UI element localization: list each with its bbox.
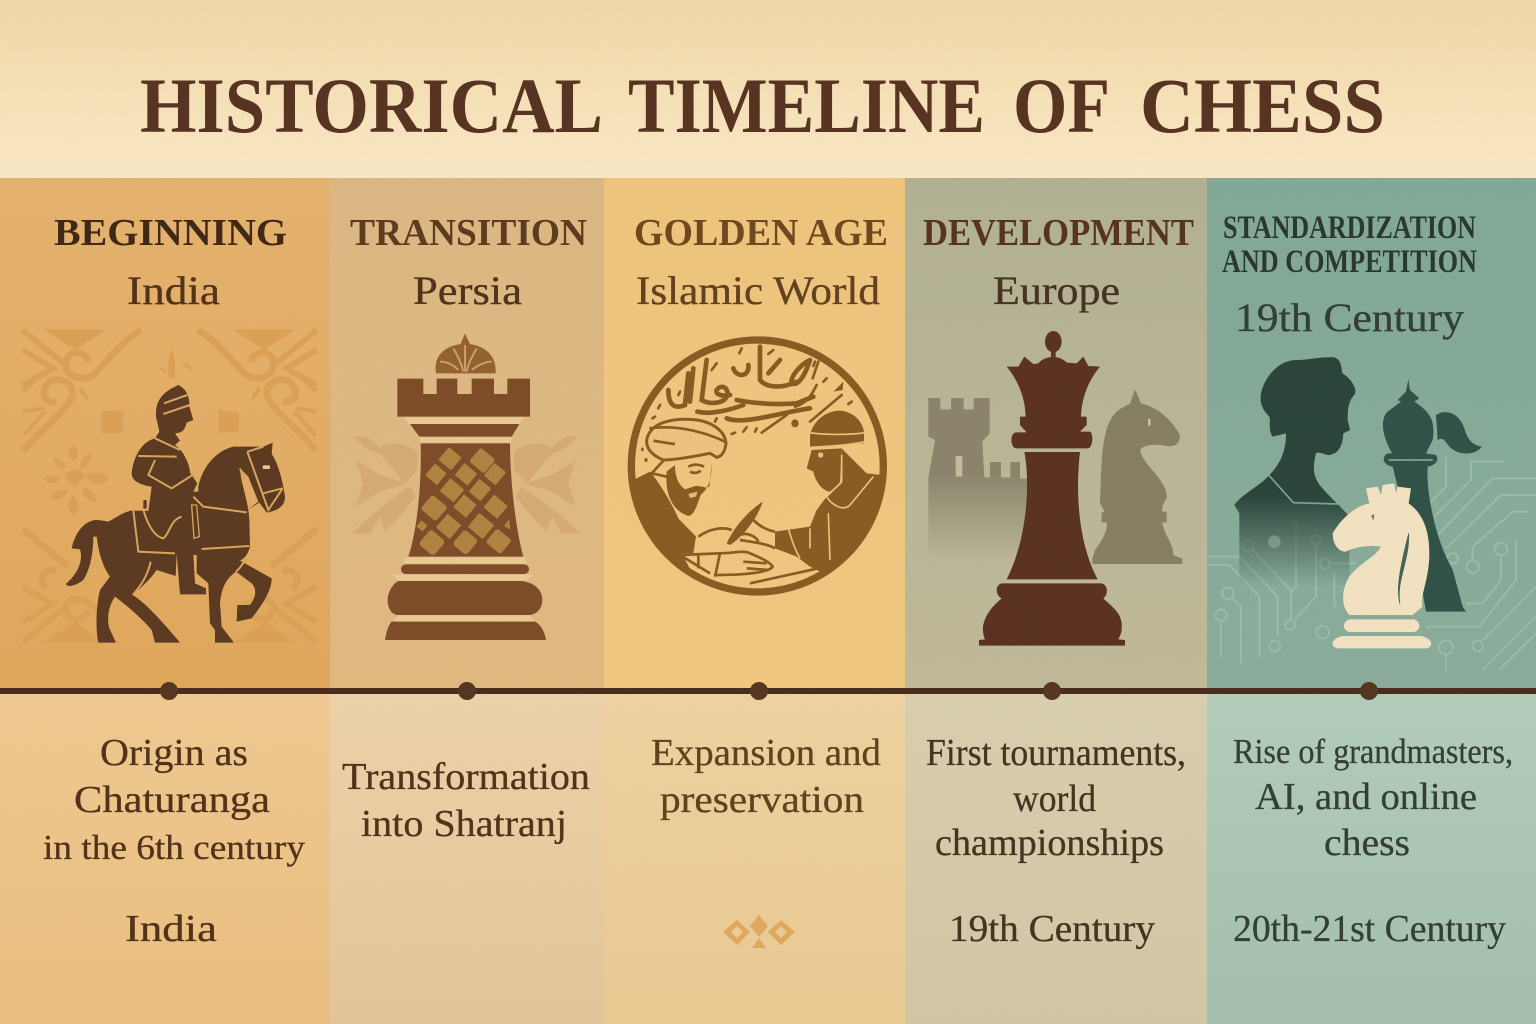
title: OF — [1013, 62, 1110, 149]
description — [926, 732, 1186, 864]
description: Origin as — [100, 732, 248, 774]
region: 19th century: 19th Century — [1235, 295, 1464, 340]
title: HISTORICAL — [140, 62, 603, 149]
panel: golden age, Islamic World — [604, 178, 905, 1024]
date label: 19th century: 19th Century — [949, 908, 1155, 950]
description: chess — [1324, 822, 1410, 864]
description: Transformation — [342, 756, 590, 798]
panel: development, Europe — [905, 178, 1207, 1024]
description: preservation — [660, 779, 864, 821]
heading: standardization and competition — [1222, 210, 1477, 280]
description: Rise of grandmasters, — [1233, 732, 1513, 771]
icon: ornament background — [23, 329, 317, 643]
region: Persia: Persia — [413, 268, 522, 313]
title: CHESS — [1140, 62, 1385, 149]
region: Europe: Europe — [993, 268, 1120, 313]
heading: standardization and competition: AND COMPETITION — [1222, 244, 1477, 280]
title — [140, 62, 1385, 149]
left scholar — [623, 411, 897, 583]
icon: castle silhouette — [928, 398, 1030, 562]
description: into Shatranj — [361, 803, 567, 845]
icon: circuit board pattern — [1208, 457, 1536, 673]
description — [651, 732, 881, 821]
hands, pen and paper — [727, 502, 763, 545]
icon: queen — [979, 331, 1125, 646]
icon: white knight — [1332, 483, 1431, 648]
title: TIMELINE — [628, 62, 985, 149]
heading: golden age: GOLDEN AGE — [634, 212, 888, 254]
heading: transition: TRANSITION — [350, 212, 587, 254]
icon: knight silhouette — [1092, 389, 1182, 564]
description: in the 6th century — [43, 828, 306, 867]
date label: 20th-21st century: 20th-21st Century — [1233, 908, 1506, 950]
description: Chaturanga — [74, 779, 270, 821]
heading: development: DEVELOPMENT — [923, 212, 1194, 254]
right scholar — [810, 411, 864, 447]
icon: small ornament — [723, 915, 795, 948]
description — [1233, 732, 1513, 864]
description — [43, 732, 306, 867]
icon: dark queen piece with hair — [1383, 379, 1482, 612]
icon: horse and rider — [66, 385, 285, 643]
icon: woman silhouette — [1234, 357, 1355, 587]
timeline axis with markers — [0, 682, 1536, 700]
date label: India: India — [125, 908, 217, 950]
icon: rook — [385, 333, 546, 640]
region: India: India — [127, 268, 220, 313]
description: AI, and online — [1255, 776, 1477, 818]
region: Islamic World: Islamic World — [636, 268, 880, 313]
icon: scholars roundel — [623, 340, 897, 592]
description: championships — [935, 822, 1164, 864]
panel: transition, Persia — [330, 178, 604, 1024]
description: Expansion and — [651, 732, 881, 774]
description: First tournaments, — [926, 732, 1186, 774]
icon: floral ornament — [352, 436, 580, 533]
heading: beginning: BEGINNING — [54, 212, 287, 254]
panel: beginning, India — [0, 178, 330, 1024]
calligraphy flourish — [652, 347, 852, 434]
heading: standardization and competition: STANDARDIZATION — [1223, 210, 1476, 246]
description: world — [1013, 778, 1096, 820]
panel: standardization and competition — [1207, 178, 1536, 1024]
description — [342, 756, 590, 845]
